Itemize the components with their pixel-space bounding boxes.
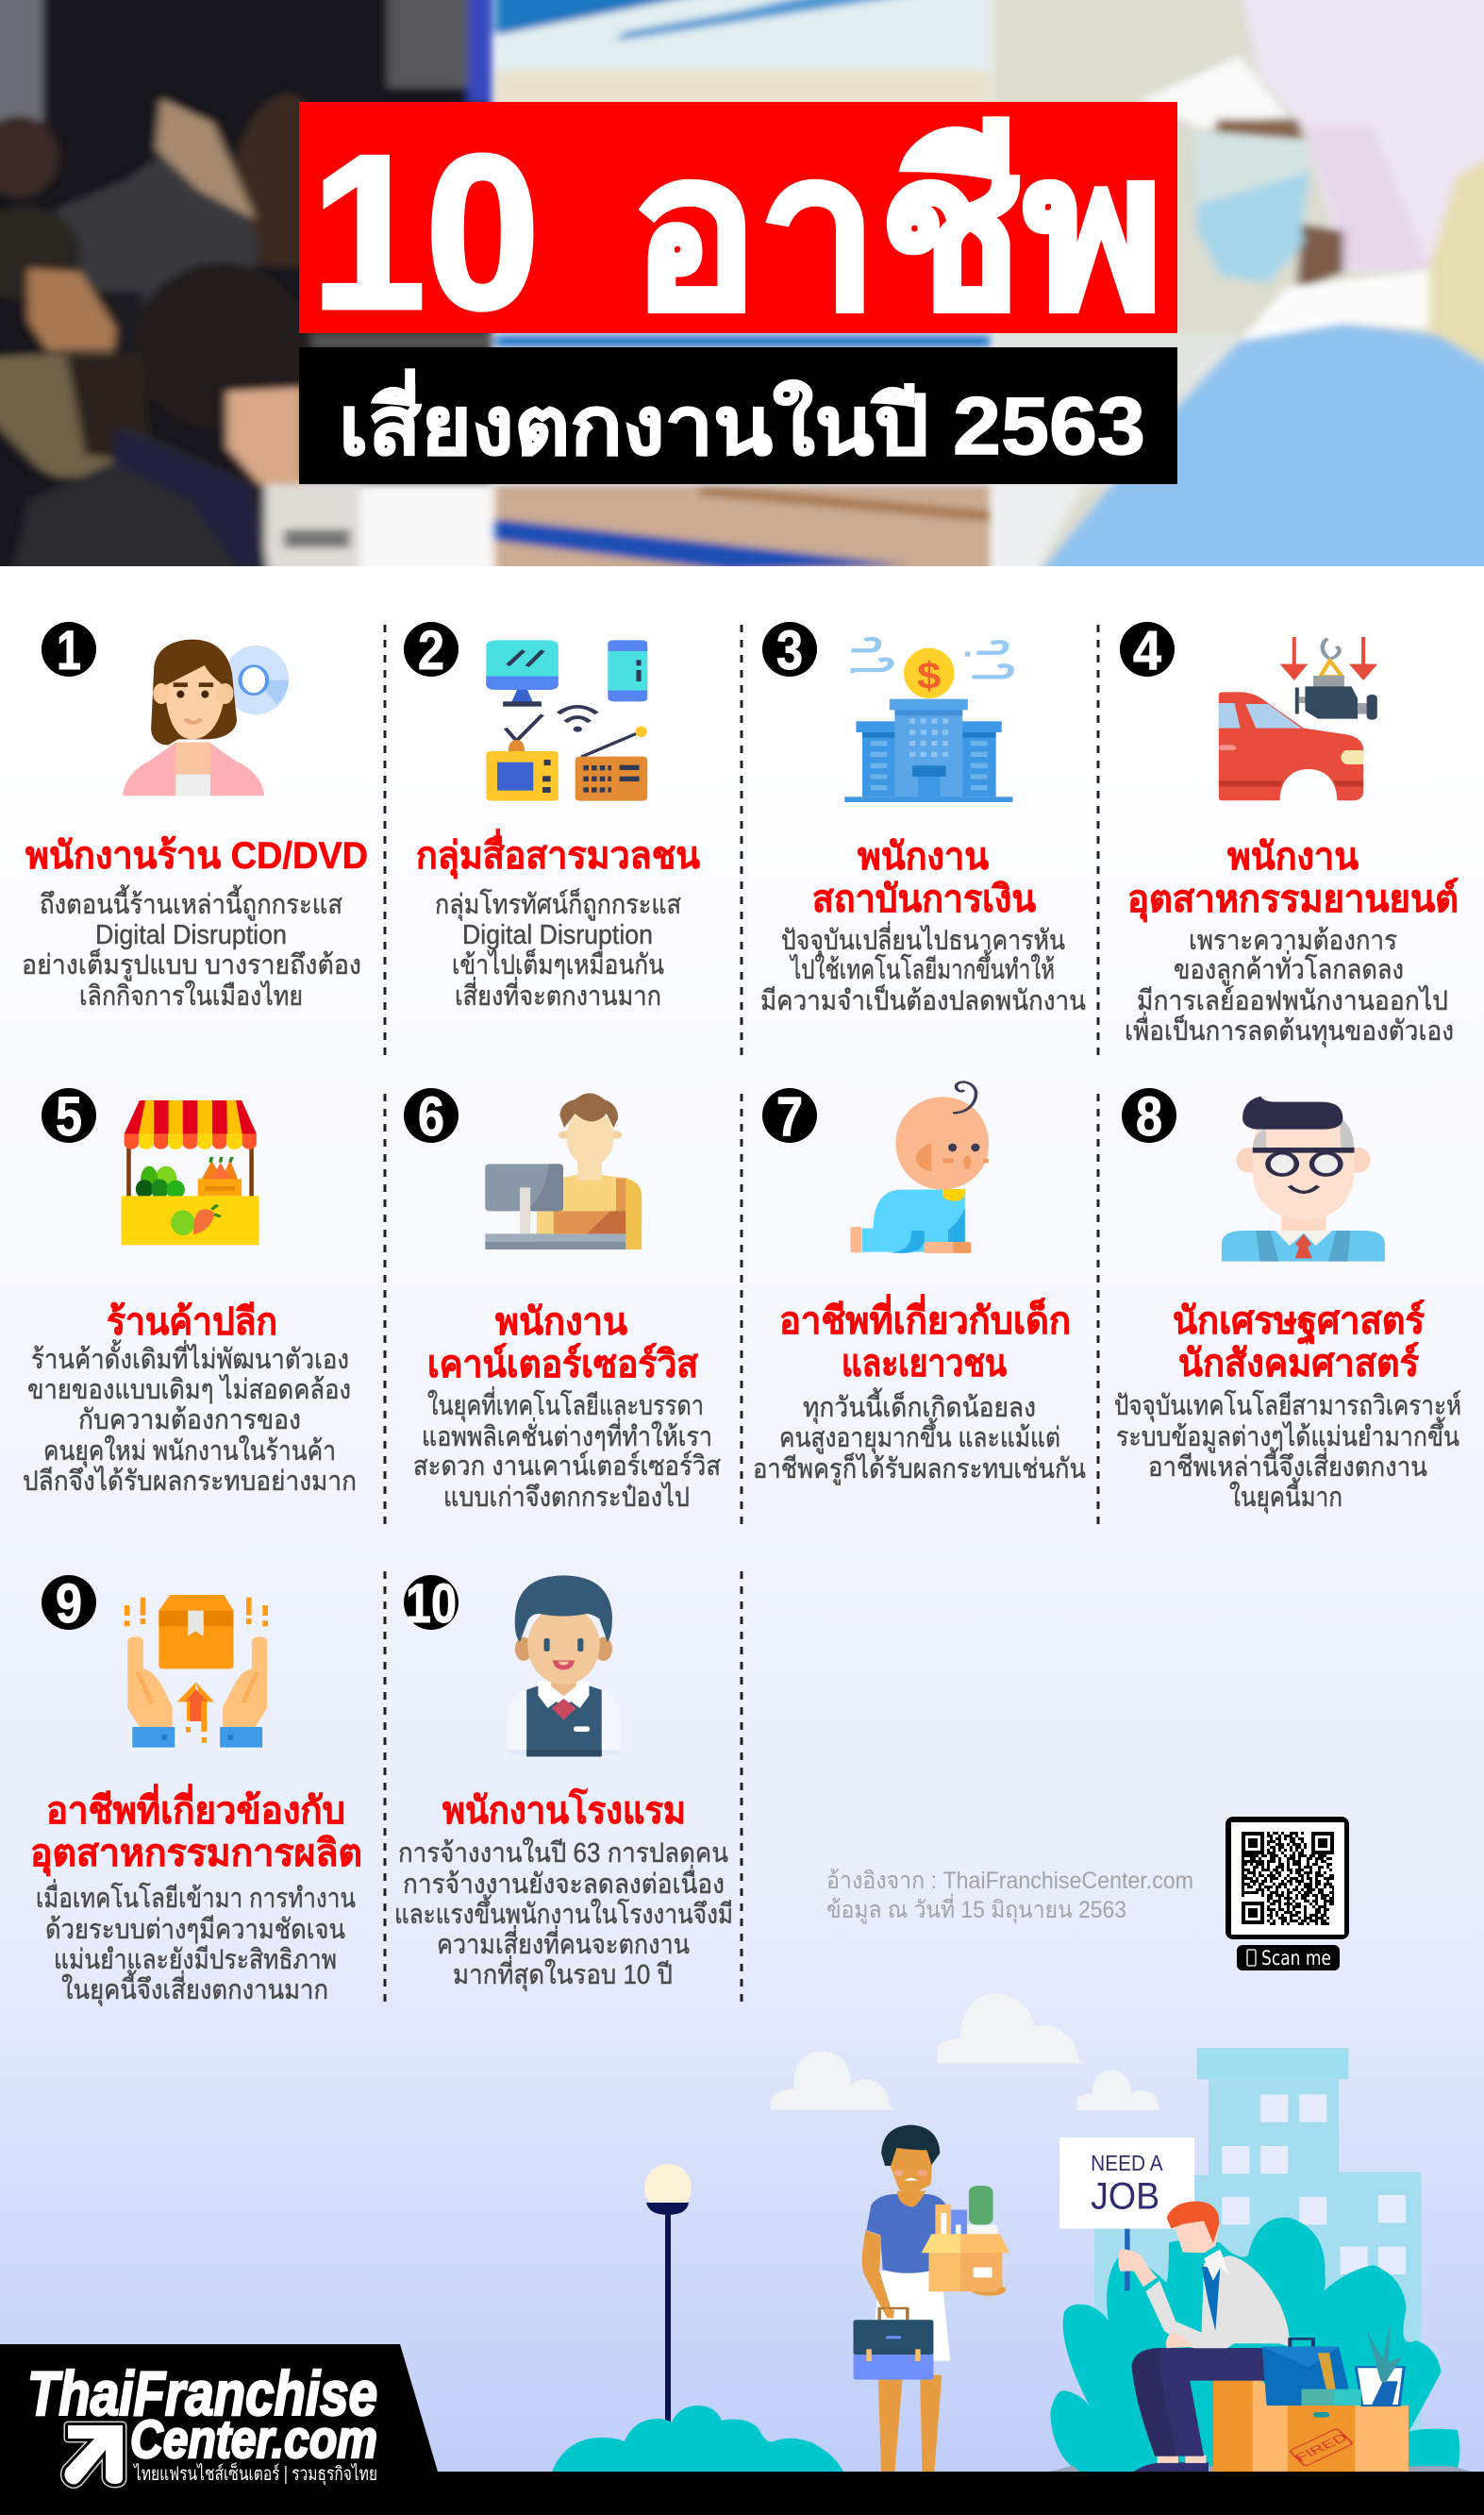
heading (1173, 1299, 1425, 1384)
heading: อุตสาหกรรมยานยนต์ (1127, 878, 1459, 923)
panel 2: mass media (404, 620, 700, 1012)
panel 3: financial institutions (760, 620, 1086, 1016)
body text: และแรงขึ้นพนักงานในโรงงานจึงมี (394, 1894, 733, 1930)
body text: ถึงตอนนี้ร้านเหล่านี้ถูกกระแส (40, 884, 342, 921)
clouds (771, 1993, 1159, 2110)
body text: เมื่อเทคโนโลยีเข้ามา การทำงาน (36, 1879, 356, 1914)
badge 3 (762, 620, 817, 681)
logo wordmark line 2: Center.com (130, 2409, 377, 2470)
heading: อาชีพที่เกี่ยวข้องกับ (46, 1784, 345, 1832)
badge 4: 4 (1133, 620, 1161, 681)
heading: พนักงาน (1227, 836, 1359, 878)
heading: พนักงาน (858, 836, 989, 878)
heading: สถาบันการเงิน (812, 879, 1036, 920)
heading (30, 1784, 362, 1877)
badge 7: 7 (776, 1086, 803, 1148)
subtitle banner: at risk of unemployment: เสี่ยงตกงานในปี 2563 (339, 368, 1145, 472)
body text: แอพพลิเคชั่นต่างๆที่ทำให้เรา (422, 1417, 712, 1452)
icon: woman with CD (123, 640, 289, 796)
title banner: 10 careers: อาชีพ (630, 110, 1164, 355)
badge 10: 10 (406, 1573, 457, 1635)
logo: Thai Franchise Center (0, 2344, 438, 2515)
badge 2: 2 (418, 620, 444, 681)
body text: ด้วยระบบต่างๆมีความชัดเจน (45, 1915, 345, 1945)
badge 6 (404, 1086, 459, 1148)
icon: cashier at counter (485, 1093, 642, 1249)
icon: media devices (486, 640, 647, 801)
photo: bank hall (495, 0, 993, 581)
body text: เลิกกิจการในเมืองไทย (79, 980, 303, 1012)
body text (753, 1387, 1086, 1485)
body text: อย่างเต็มรูปแบบ บางรายถึงต้อง (22, 947, 361, 981)
heading (779, 1294, 1071, 1384)
illustration: job-loss scene (771, 1993, 1472, 2485)
body text: เสี่ยงที่จะตกงานมาก (455, 977, 661, 1012)
body text: เพราะความต้องการ (1189, 926, 1397, 956)
photo: factory worker in protective suit (992, 0, 1484, 581)
body text: ร้านค้าดั้งเดิมที่ไม่พัฒนาตัวเอง (31, 1339, 349, 1375)
scan me label (1237, 1945, 1340, 1970)
badge 2 (404, 620, 459, 681)
icon: hands holding box (127, 1595, 267, 1748)
body text: คนสูงอายุมากขึ้น และแม้แต่ (779, 1417, 1060, 1454)
standing woman (854, 2125, 1009, 2485)
heading (812, 836, 1036, 920)
illustration: street lamp (644, 2164, 692, 2481)
body text (1125, 926, 1454, 1048)
source credit text (826, 1868, 1193, 1924)
body text: เพื่อเป็นการลดต้นทุนของตัวเอง (1125, 1012, 1454, 1048)
panel 5: retail shops (23, 1086, 357, 1497)
heading: และเยาวชน (842, 1343, 1007, 1384)
body text (23, 1339, 357, 1497)
icon: hotel staff member (508, 1575, 620, 1756)
panel 7: children and youth careers (753, 1082, 1086, 1485)
seated man (1119, 2202, 1290, 2477)
body text: Digital Disruption (95, 920, 287, 950)
heading: เคาน์เตอร์เซอร์วิส (427, 1343, 699, 1385)
badge 1 (42, 620, 96, 681)
body text: การจ้างงานในปี 63 การปลดคน (398, 1836, 728, 1869)
body text: อาชีพเหล่านี้จึงเสี่ยงตกงาน (1148, 1447, 1427, 1483)
cardboard box (1213, 2381, 1409, 2477)
body text: กลุ่มโทรทัศน์ก็ถูกกระแส (435, 887, 681, 921)
body text: แม่นยำและยังมีประสิทธิภาพ (54, 1945, 337, 1975)
cardboard box: FIRED (1292, 2431, 1351, 2464)
icon: bank building with coin (844, 639, 1012, 802)
body text: ในยุคนี้มาก (1229, 1477, 1342, 1514)
scan me label: Scan me (1261, 1947, 1331, 1970)
badge 9 (42, 1573, 96, 1635)
body text: มากที่สุดในรอบ 10 ปี (453, 1955, 673, 1991)
body text: มีการเลย์ออฟพนักงานออกไป (1137, 984, 1448, 1016)
heading: นักสังคมศาสตร์ (1178, 1342, 1419, 1384)
logo wordmark line 1: ThaiFranchise (27, 2358, 377, 2428)
body text: ในยุคที่เทคโนโลยีและบรรดา (427, 1386, 704, 1422)
badge 5 (42, 1086, 96, 1148)
need a job sign: JOB (1091, 2174, 1159, 2217)
body text: มีความจำเป็นต้องปลดพนักงาน (760, 983, 1086, 1016)
dashed column dividers (385, 625, 1098, 2002)
badge 8: 8 (1136, 1086, 1162, 1148)
icon: car and engine (1219, 637, 1377, 800)
body text: Digital Disruption (462, 920, 653, 950)
body text (413, 1386, 721, 1513)
badge 1: 1 (57, 620, 81, 681)
photo: job seekers crowd (0, 0, 494, 581)
body text: แบบเก่าจึงตกกระป๋องไป (443, 1481, 690, 1513)
body text: ทุกวันนี้เด็กเกิดน้อยลง (803, 1387, 1036, 1424)
QR code (1226, 1817, 1349, 1939)
title banner: 10 careers (299, 102, 1177, 355)
plants (1050, 2218, 1459, 2477)
need a job sign: NEED A (1091, 2152, 1163, 2176)
badge 5: 5 (56, 1086, 82, 1148)
body text: การจ้างงานยังจะลดลงต่อเนื่อง (403, 1865, 725, 1900)
body text: ปัจจุบันเปลี่ยนไปธนาคารหัน (781, 921, 1065, 957)
heading: อุตสาหกรรมการผลิต (30, 1833, 362, 1877)
badge 3: 3 (776, 620, 803, 681)
panel 9: manufacturing industry (30, 1573, 362, 2006)
heading: พนักงาน (495, 1301, 627, 1343)
body text (435, 887, 681, 1012)
heading: กลุ่มสื่อสารมวลชน (416, 829, 700, 880)
icon: crawling baby (850, 1082, 989, 1253)
building (1094, 2048, 1421, 2446)
icon: market stall (122, 1100, 258, 1245)
logo tagline: ไทยแฟรนไชส์เซ็นเตอร์ | รวมธุรกิจไทย (132, 2461, 377, 2486)
body text: ในยุคนี้จึงเสี่ยงตกงานมาก (61, 1970, 328, 2006)
heading: นักเศรษฐศาสตร์ (1173, 1299, 1425, 1346)
body text: ขายของแบบเดิมๆ ไม่สอดคล้อง (27, 1373, 351, 1405)
panel 4: automotive industry (1120, 620, 1459, 1048)
need a job sign (1059, 2138, 1194, 2290)
shadow under seat (1048, 2466, 1472, 2472)
body text (394, 1836, 733, 1991)
body text: กับความต้องการของ (78, 1405, 301, 1435)
bag and office items (1262, 2323, 1404, 2406)
panel 8: economists and sociologists (1114, 1086, 1461, 1514)
body text: อาชีพครูก็ได้รับผลกระทบเช่นกัน (753, 1451, 1086, 1485)
heading: ร้านค้าปลีก (107, 1301, 277, 1343)
badge 6: 6 (418, 1086, 444, 1148)
badge 7 (762, 1086, 817, 1148)
logo arrow (64, 2425, 123, 2484)
body text (760, 921, 1086, 1016)
body text: คนยุคใหม่ พนักงานในร้านค้า (43, 1434, 336, 1467)
source credit text: ข้อมูล ณ วันที่ 15 มิถุนายน 2563 (826, 1893, 1126, 1924)
subtitle banner: at risk of unemployment (299, 347, 1177, 484)
body text (22, 884, 361, 1012)
body text (36, 1879, 356, 2006)
badge 8 (1122, 1086, 1176, 1148)
body text: ความเสี่ยงที่คนจะตกงาน (437, 1925, 690, 1960)
body text: เข้าไปเต็มๆเหมือนกัน (452, 947, 664, 981)
heading: พนักงานร้าน CD/DVD (25, 835, 368, 877)
body text: ไปใช้เทคโนโลยีมากขึ้นทำให้ (789, 949, 1055, 985)
heading: พนักงานโรงแรม (442, 1788, 686, 1832)
ground strip (0, 2472, 1484, 2515)
body text: สะดวก งานเคาน์เตอร์เซอร์วิส (413, 1450, 721, 1482)
icon: bank building with coin: $ (917, 655, 942, 697)
panel 10: hotel staff (394, 1573, 733, 1991)
heading (1127, 836, 1459, 923)
heading: อาชีพที่เกี่ยวกับเด็ก (779, 1294, 1071, 1342)
body text (1114, 1389, 1461, 1514)
badge 9: 9 (56, 1573, 82, 1635)
badge 4 (1120, 620, 1175, 681)
icon: man with glasses (1222, 1097, 1385, 1262)
panel 6: counter service staff (404, 1086, 721, 1513)
body text: ของลูกค้าทั่วโลกลดลง (1174, 950, 1404, 986)
panel 1: CD/DVD store staff (22, 620, 368, 1012)
body text: ปลีกจึงได้รับผลกระทบอย่างมาก (23, 1465, 357, 1497)
illustration: bushes behind lamp (552, 2406, 843, 2472)
heading (427, 1301, 699, 1385)
title banner: 10 careers: 10 (311, 110, 540, 355)
source credit text: อ้างอิงจาก : ThaiFranchiseCenter.com (826, 1868, 1193, 1894)
header photo collage (0, 0, 1484, 581)
